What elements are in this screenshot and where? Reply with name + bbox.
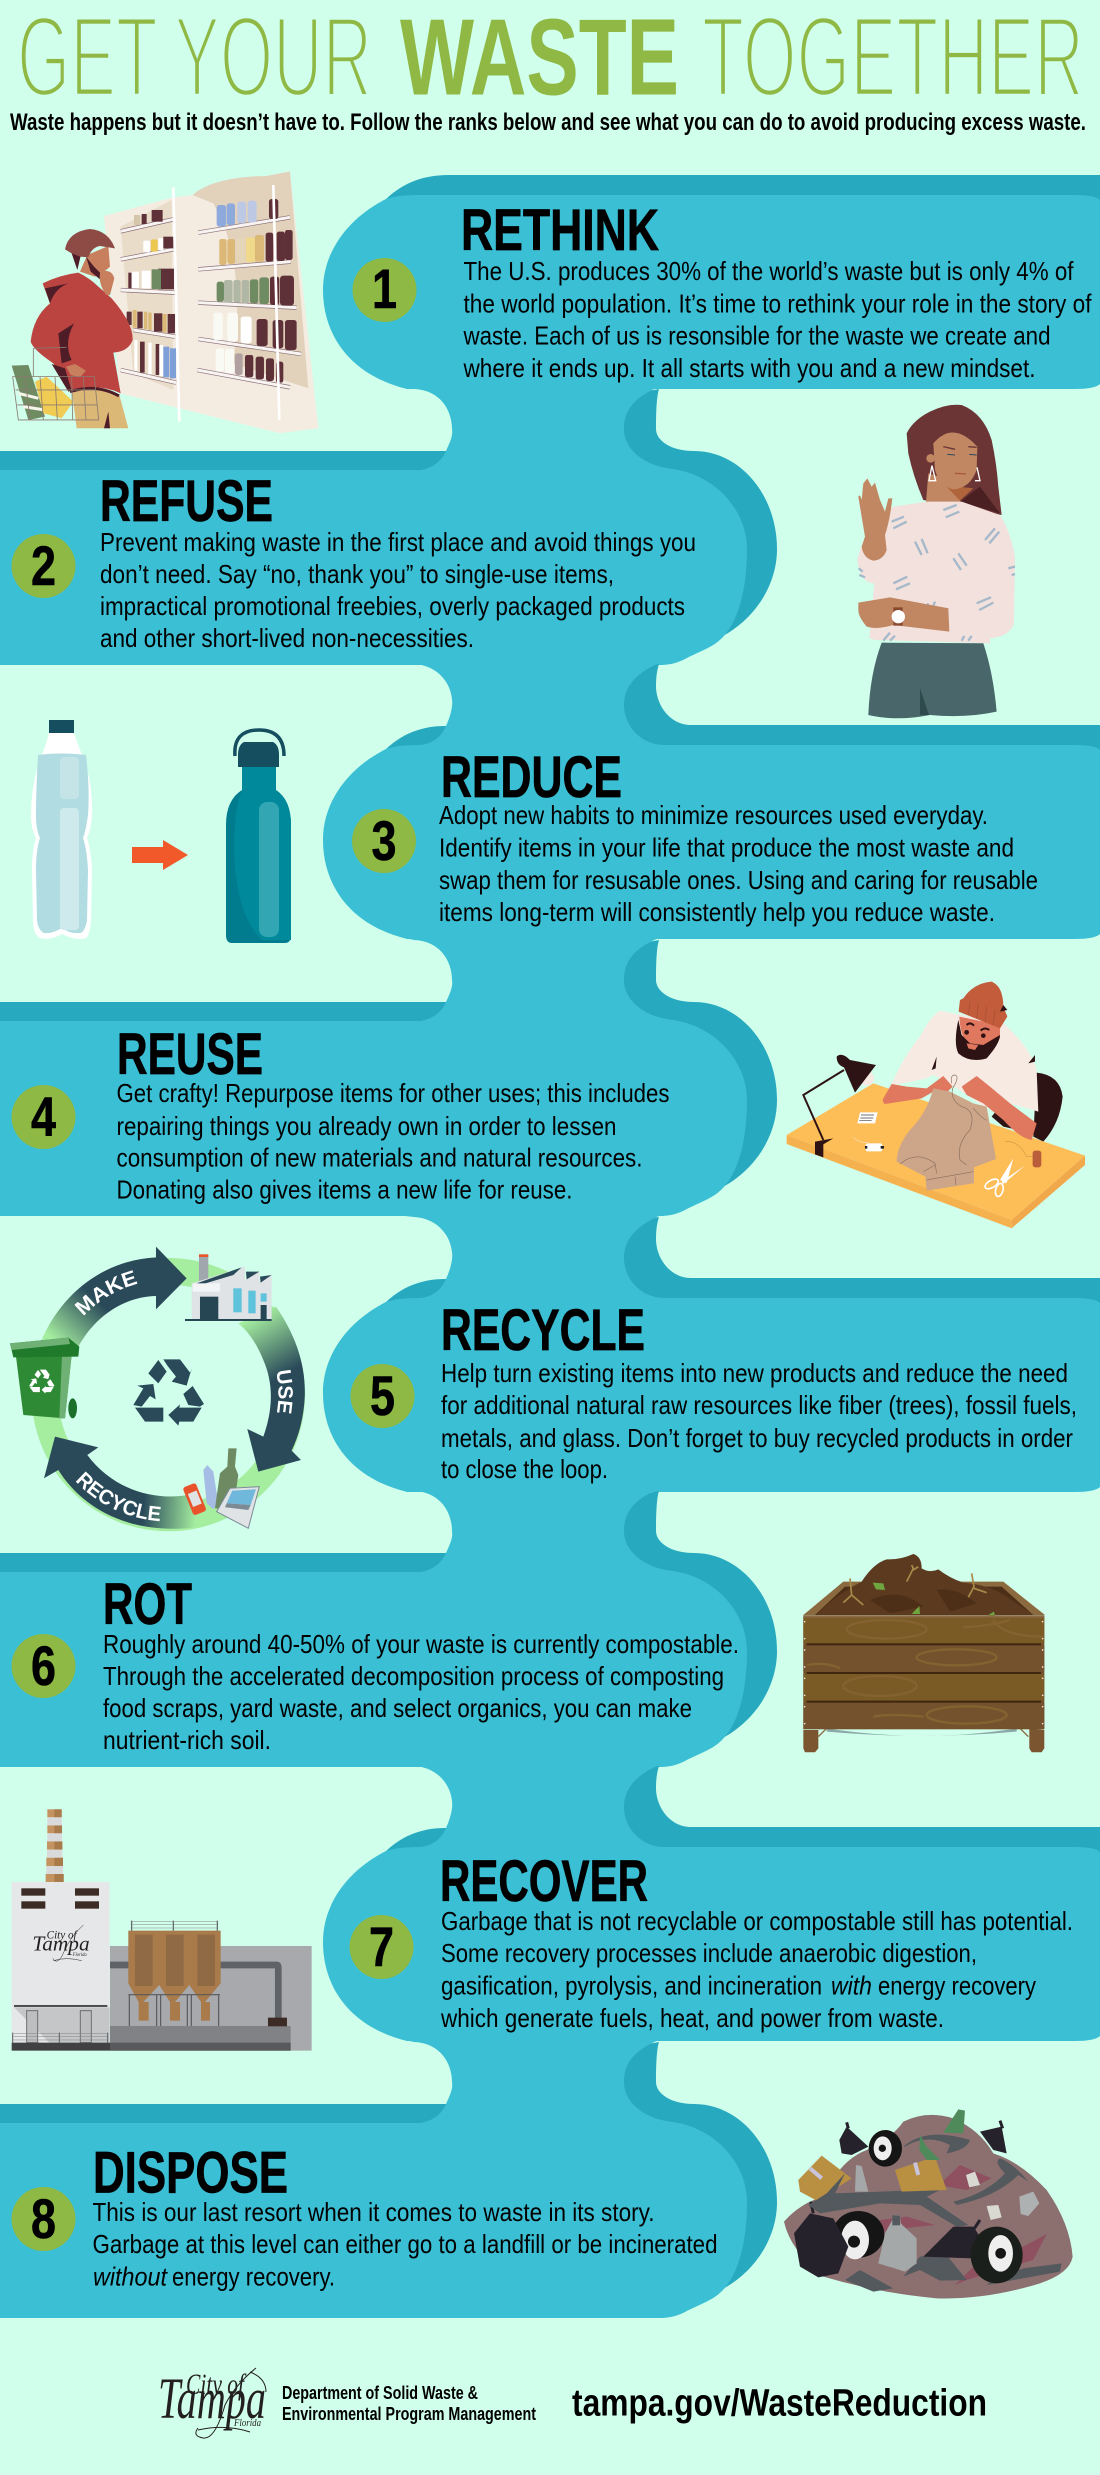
heading: RECYCLE [441, 1298, 645, 1363]
illustration: person mending clothes [787, 982, 1085, 1228]
body text [441, 1358, 1077, 1484]
heading: DISPOSE [93, 2140, 288, 2206]
panel: refuse [0, 387, 777, 665]
arrow: use: USE [276, 1370, 293, 1414]
department name: Environmental Program Management [282, 2404, 536, 2424]
arrow [132, 840, 188, 870]
logo: City of Tampa [158, 2366, 266, 2438]
heading: ROT [103, 1572, 192, 1637]
logo: City of Tampa: Tampa [158, 2366, 266, 2431]
logo on building: Tampa [32, 1932, 90, 1956]
panel shape [0, 2040, 777, 2318]
heading: REDUCE [441, 745, 622, 810]
title: WASTE [400, 0, 679, 118]
panel shape [323, 663, 1100, 939]
body text: repairing things you already own in order to lessen [116, 1111, 616, 1141]
number badge: 7 [369, 1915, 394, 1978]
number badge [12, 1085, 76, 1149]
icon: recycling symbol [133, 1359, 204, 1426]
icon: recyclables [183, 1448, 259, 1528]
body text [463, 256, 1092, 383]
number badge: 5 [370, 1364, 395, 1427]
body text: food scraps, yard waste, and select organics, you can make [103, 1693, 692, 1723]
body text: Roughly around 40-50% of your waste is currently compostable. [103, 1629, 739, 1659]
illustration: landfill pile [784, 2109, 1073, 2298]
body text: Donating also gives items a new life for reuse. [116, 1174, 572, 1204]
body text [92, 2197, 718, 2292]
body text [439, 800, 1038, 927]
panel: recover [323, 1765, 1100, 2041]
body text: Garbage at this level can either go to a landfill or be incinerated [92, 2229, 718, 2259]
icon: recycling bin [10, 1338, 79, 1418]
number badge [12, 534, 76, 598]
illustration: compost bin [803, 1554, 1045, 1752]
body text: Prevent making waste in the first place and avoid things you [100, 527, 696, 557]
panel shape [323, 1765, 1100, 2041]
panel: reuse [0, 938, 777, 1216]
number badge [12, 2187, 76, 2251]
body text: gasification, pyrolysis, and incineration [441, 1970, 822, 2000]
panel: recycle [323, 1216, 1100, 1492]
url: tampa.gov/WasteReduction [572, 2382, 987, 2424]
body text: consumption of new materials and natural resources. [116, 1142, 642, 1172]
logo on building: Florida [72, 1953, 87, 1958]
body text: and other short-lived non-necessities. [100, 623, 474, 653]
number badge [350, 1915, 414, 1979]
icon: reusable bottle [226, 730, 291, 943]
arrow: use [238, 1306, 305, 1472]
number badge: 2 [31, 534, 56, 597]
body text: items long-term will consistently help you reduce waste. [439, 897, 995, 927]
number badge [12, 1634, 76, 1698]
number badge: 4 [31, 1085, 56, 1148]
body text: nutrient-rich soil. [103, 1725, 271, 1755]
heading: REFUSE [100, 469, 273, 534]
illustration: waste-to-energy plant [12, 1809, 312, 2051]
illustration: woman refusing [857, 405, 1015, 718]
title [17, 0, 1084, 121]
number badge [352, 257, 416, 322]
number badge: 6 [31, 1634, 56, 1697]
body text: energy recovery. [172, 2262, 335, 2292]
illustration: plastic bottle to reusable bottle [31, 720, 291, 943]
department name: Department of Solid Waste & [282, 2383, 478, 2403]
panel shape [0, 1489, 777, 1767]
body text: Some recovery processes include anaerobic digestion, [441, 1938, 977, 1968]
body text: Adopt new habits to minimize resources used everyday. [439, 800, 988, 830]
number badge [352, 809, 416, 873]
panel: reduce [323, 663, 1100, 939]
body text: without [93, 2262, 169, 2292]
body text: Identify items in your life that produce the most waste and [439, 832, 1014, 862]
panel shape [0, 387, 777, 665]
arrow: recycle: RECYCLE [76, 1472, 161, 1522]
heading: RETHINK [461, 198, 659, 263]
body text: This is our last resort when it comes to waste in its story. [92, 2197, 654, 2227]
body text: impractical promotional freebies, overly packaged products [100, 591, 685, 621]
body text [116, 1078, 670, 1204]
panel shape [323, 1216, 1100, 1492]
arrow: recycle [44, 1436, 194, 1529]
illustration: shopper at store shelves [12, 171, 318, 433]
number badge: 1 [372, 257, 397, 320]
logo: City of Tampa: Florida [233, 2417, 261, 2429]
footer [158, 2366, 987, 2438]
panel shape [323, 175, 1100, 389]
panel: rethink [323, 175, 1100, 389]
number badge [350, 1364, 414, 1428]
body text: Get crafty! Repurpose items for other uses; this includes [116, 1078, 670, 1108]
heading: RECOVER [440, 1849, 648, 1914]
illustration: make use recycle loop [10, 1246, 305, 1532]
body text: which generate fuels, heat, and power from waste. [440, 2003, 944, 2033]
body text [440, 1906, 1073, 2033]
body text: with [831, 1970, 872, 2000]
arrow: make: MAKE [74, 1270, 138, 1316]
panel shape [0, 938, 777, 1216]
body text [103, 1629, 739, 1755]
panel: dispose [0, 2040, 777, 2318]
heading: REUSE [117, 1022, 263, 1087]
logo on building [32, 1925, 90, 1961]
body text [100, 527, 696, 653]
department name [282, 2383, 536, 2424]
icon: plastic bottle [31, 720, 92, 939]
panel: rot [0, 1489, 777, 1767]
body text: Through the accelerated decomposition process of composting [103, 1661, 724, 1691]
icon: factory [185, 1254, 272, 1321]
arrow: make [42, 1246, 187, 1346]
number badge: 3 [372, 809, 396, 872]
body text: don’t need. Say “no, thank you” to single-use items, [100, 559, 614, 589]
logo on building: City of [47, 1930, 78, 1942]
number badge: 8 [31, 2187, 56, 2250]
body text: to close the loop. [441, 1454, 608, 1484]
body text: energy recovery [878, 1970, 1036, 2000]
logo: City of Tampa: City of [186, 2368, 247, 2401]
